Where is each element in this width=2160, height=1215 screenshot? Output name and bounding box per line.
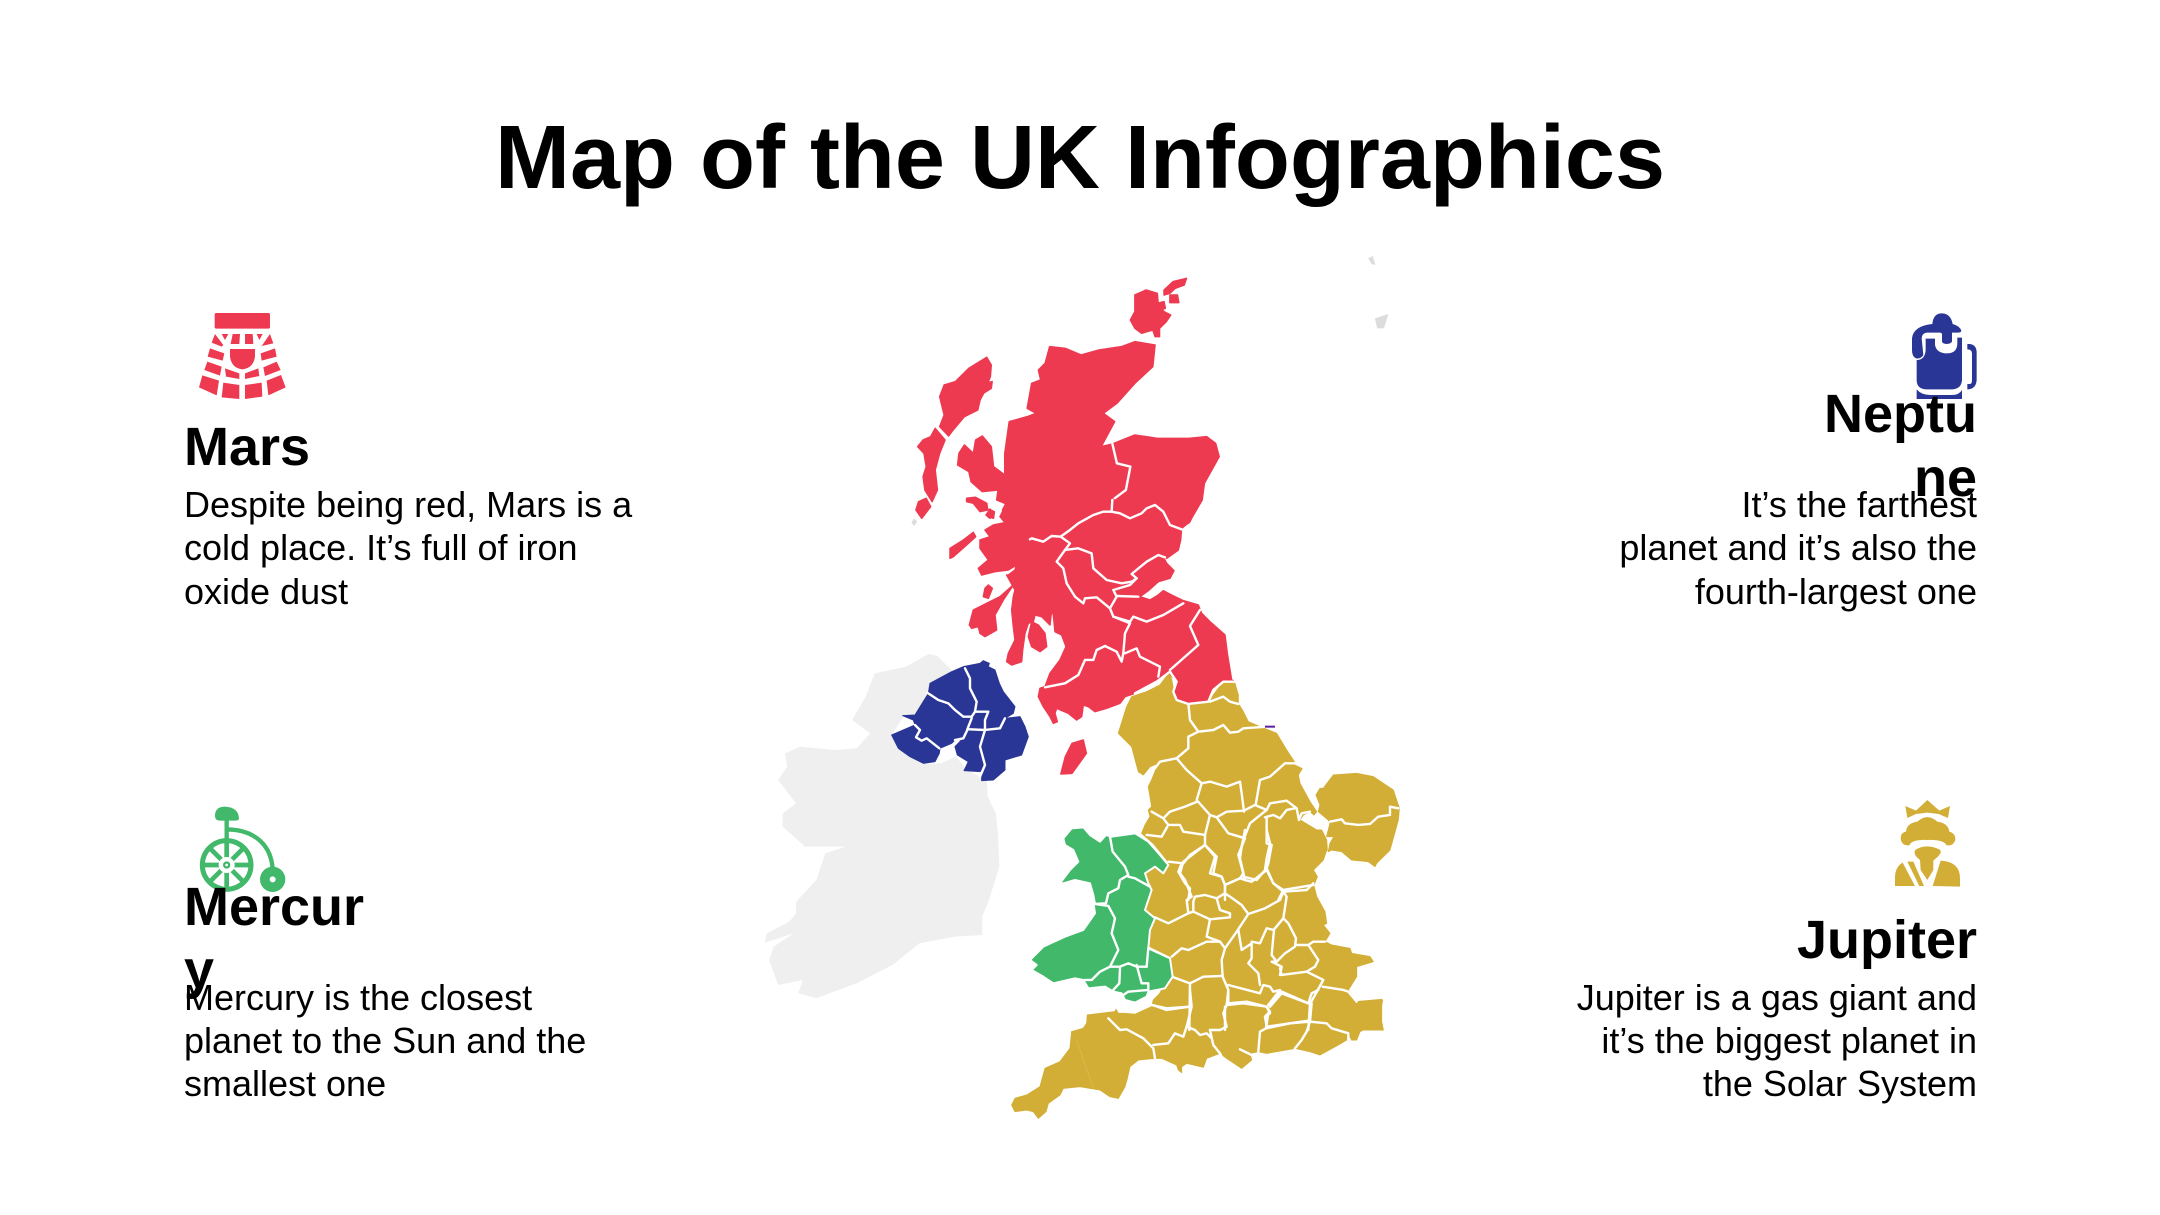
icon: king with crown [1895,800,1960,887]
text: Jupiter description: the Solar System [1703,1063,1977,1104]
heading: Mars: Mars [184,417,310,477]
heading: Neptune: Neptu [1824,384,1977,444]
map region: Northern Ireland [892,661,1028,781]
icon: penny-farthing bicycle [202,807,285,892]
map region: northern isles in grey [911,256,1388,526]
text: Mars description: Despite being red, Mars is a [184,484,633,525]
text: Mars description: oxide dust [184,571,348,612]
text: Mercury description: planet to the Sun and the [184,1020,586,1061]
title: Map of the UK Infographics [495,108,1665,208]
icon: beer mug [1912,313,1977,399]
text: Mars description: cold place. It’s full of iron [184,527,578,568]
text: Neptune description [1619,484,1977,612]
text: Jupiter description: Jupiter is a gas giant and [1577,977,1977,1018]
heading: Neptune [1824,384,1977,508]
icon: kilt [199,313,286,399]
heading: Jupiter: Jupiter [1797,910,1977,970]
text: Jupiter description [1577,977,1977,1104]
text: Mars description [184,484,633,612]
text: Mercury description [184,977,586,1104]
map region: Ireland [765,654,999,998]
heading: Mercury [184,877,364,1000]
text: Jupiter description: it’s the biggest planet in [1601,1020,1977,1061]
text: Mercury description: smallest one [184,1063,386,1104]
map region: England [1012,672,1399,1118]
map region: Scotland [916,278,1235,774]
text: Neptune description: It’s the farthest [1742,484,1977,525]
heading: Mercury: Mercur [184,877,364,937]
heading: Mercury: y [184,940,214,1000]
text: Neptune description: fourth-largest one [1695,571,1977,612]
map of the UK [765,256,1399,1118]
text: Mercury description: Mercury is the closest [184,977,532,1018]
heading: Neptune: ne [1914,448,1977,508]
text: Neptune description: planet and it’s also the [1619,527,1977,568]
map region: Wales [1030,827,1173,1003]
